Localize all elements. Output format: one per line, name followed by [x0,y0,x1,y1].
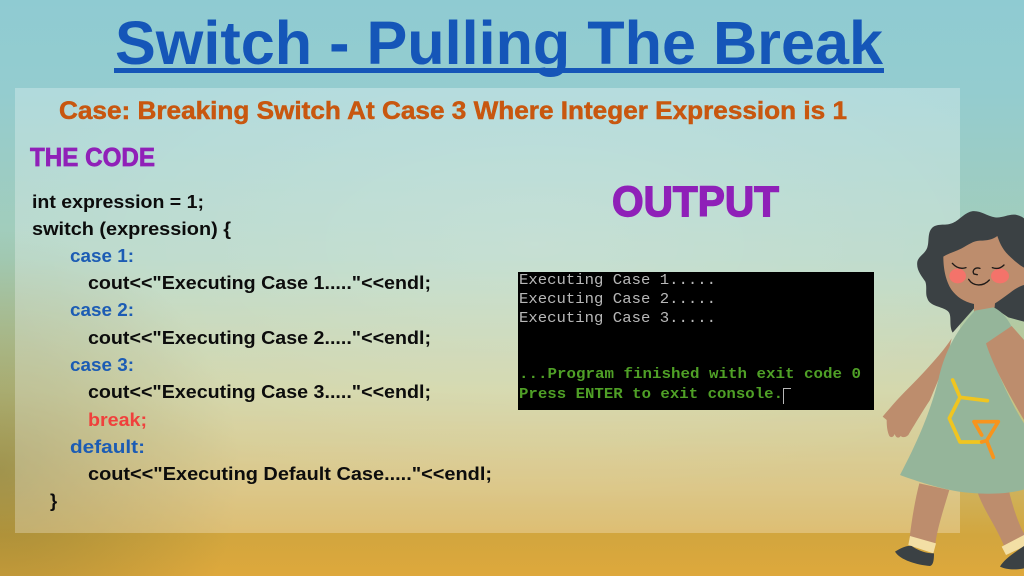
left arm [883,338,952,438]
code block: cout<<"Executing Case 2....."<<endl; [88,327,431,348]
code block [32,191,492,511]
title: Switch - Pulling The Break [115,9,883,77]
console output screenshot: Press ENTER to exit console. [519,386,783,403]
panel: translucent content card [15,88,960,533]
console output screenshot: ...Program finished with exit code 0 [519,366,861,383]
hair [917,211,1024,333]
dress logo [949,380,998,457]
shoes [895,546,1024,569]
code block: cout<<"Executing Case 1....."<<endl; [88,272,431,293]
right arm [986,326,1024,420]
case heading: Case: Breaking Switch At Case 3 Where Integer Expression is 1 [59,97,847,125]
code block: case 3: [70,354,134,375]
code block: int expression = 1; [32,191,204,212]
dress [900,307,1024,494]
console output screenshot: Executing Case 2..... [519,291,716,308]
code block: cout<<"Executing Default Case....."<<endl; [88,463,492,484]
heading: the code: THE CODE [30,142,155,172]
console output screenshot: Executing Case 1..... [519,272,716,289]
code block: switch (expression) { [32,218,231,239]
eyes, nose and smile [952,263,1004,285]
illustration: girl [883,211,1024,569]
code block: case 1: [70,245,134,266]
code block: cout<<"Executing Case 3....."<<endl; [88,381,431,402]
code block: default: [70,436,145,457]
code block: case 2: [70,299,134,320]
face [943,236,1024,313]
legs [909,483,1024,548]
heading: output: OUTPUT [612,178,779,226]
console output screenshot [518,272,874,410]
code block: } [50,490,57,511]
cheeks [949,269,966,283]
code block: break; [88,409,147,430]
socks [908,535,1024,555]
console output screenshot: Executing Case 3..... [519,310,716,327]
